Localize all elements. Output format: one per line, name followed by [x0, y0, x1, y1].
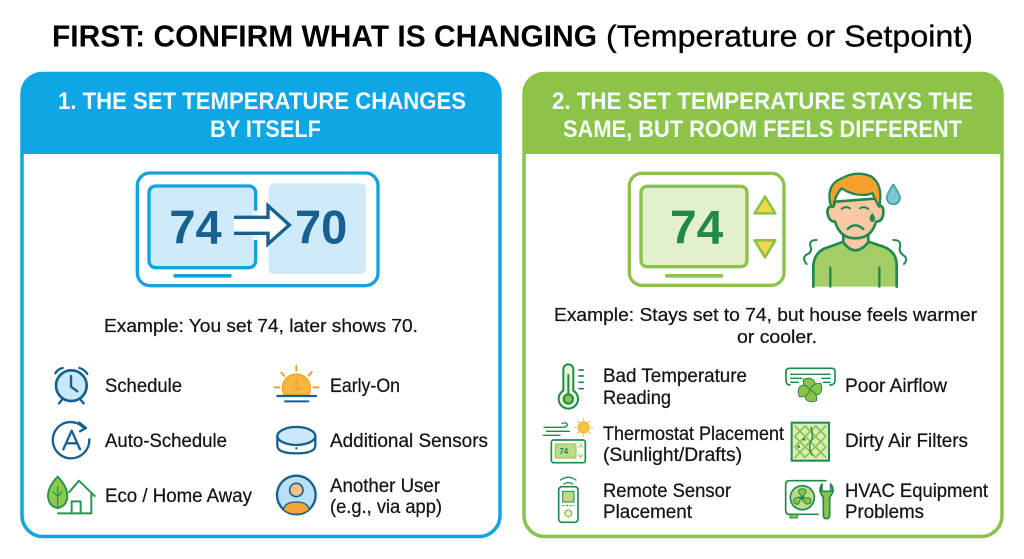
title: FIRST: CONFIRM WHAT IS CHANGING — [52, 18, 597, 54]
thermostat 74 to 70 — [137, 173, 378, 286]
title: (Temperature or Setpoint) — [606, 18, 973, 54]
item: remote sensor placement: Remote Sensor — [603, 481, 732, 502]
item: dirty air filters: Dirty Air Filters — [845, 431, 968, 452]
icon: thermostat with sun and drafts — [543, 418, 593, 463]
item: remote sensor placement — [559, 477, 732, 523]
icon: auto cycle A — [53, 422, 89, 458]
item: early-on — [274, 366, 400, 401]
item: dirty air filters — [792, 423, 968, 461]
item: another user — [277, 476, 442, 518]
icon: dirty filter — [792, 423, 829, 461]
icon: remote sensor — [559, 477, 578, 522]
icon: sunrise — [274, 366, 318, 401]
thermostat 74 to 70: 70 — [295, 201, 347, 254]
icon: leaf and house — [48, 477, 95, 513]
icon: hvac unit and wrench — [786, 481, 833, 519]
item: bad temperature reading: Reading — [603, 388, 671, 409]
example text 2: Example: Stays set to 74, but house feels warmer — [554, 304, 977, 325]
item: thermostat placement: Thermostat Placement — [603, 424, 785, 445]
example text 2 — [554, 304, 977, 347]
item: early-on: Early-On — [330, 376, 400, 397]
icon: thermostat with sun and drafts: 74 — [559, 447, 569, 456]
title — [52, 18, 973, 54]
icon: air conditioner with fan — [786, 368, 835, 402]
down arrow — [755, 240, 775, 257]
icon: alarm clock — [55, 368, 87, 403]
example text 1: Example: You set 74, later shows 70. — [104, 315, 418, 336]
item: another user: (e.g., via app) — [330, 497, 442, 518]
item: hvac equipment problems: Problems — [845, 502, 924, 523]
item: poor airflow: Poor Airflow — [845, 376, 947, 397]
item: bad temperature reading: Bad Temperature — [603, 366, 747, 387]
panel: set temperature changes — [20, 72, 502, 536]
panel 2 header: 2. THE SET TEMPERATURE STAYS THE — [552, 88, 973, 115]
item: schedule: Schedule — [105, 376, 182, 397]
panel: set temperature stays the same — [522, 72, 1004, 536]
item: additional sensors — [277, 427, 488, 453]
thermostat 74 to 70: 74 — [169, 201, 222, 254]
item: hvac equipment problems — [786, 481, 989, 523]
thermostat 74 — [629, 173, 784, 285]
item: bad temperature reading — [559, 364, 747, 409]
example text 2: or cooler. — [737, 326, 817, 347]
icon: sensor puck — [277, 427, 315, 453]
panel 2 header — [522, 72, 1004, 154]
item: additional sensors: Additional Sensors — [330, 431, 488, 452]
up arrow — [755, 197, 775, 213]
panel 2 header: SAME, BUT ROOM FEELS DIFFERENT — [563, 116, 962, 143]
item: thermostat placement: (Sunlight/Drafts) — [603, 445, 742, 466]
person feeling uncomfortable — [804, 174, 906, 287]
thermostat 74: 74 — [670, 201, 724, 254]
item: remote sensor placement: Placement — [603, 502, 693, 523]
item: another user: Another User — [330, 476, 441, 497]
item: auto-schedule: Auto-Schedule — [105, 431, 227, 452]
panel 1 header: 1. THE SET TEMPERATURE CHANGES — [58, 88, 466, 115]
icon: thermometer — [559, 364, 583, 409]
item: eco home away: Eco / Home Away — [105, 486, 252, 507]
item: auto-schedule — [53, 422, 227, 458]
panel 1 header: BY ITSELF — [210, 116, 321, 143]
item: poor airflow — [786, 368, 947, 402]
item: eco home away — [48, 477, 252, 513]
item: hvac equipment problems: HVAC Equipment — [845, 481, 989, 502]
item: thermostat placement — [543, 418, 785, 466]
panel 1 header — [20, 72, 502, 154]
icon: user avatar — [277, 476, 316, 514]
item: schedule — [55, 368, 182, 403]
